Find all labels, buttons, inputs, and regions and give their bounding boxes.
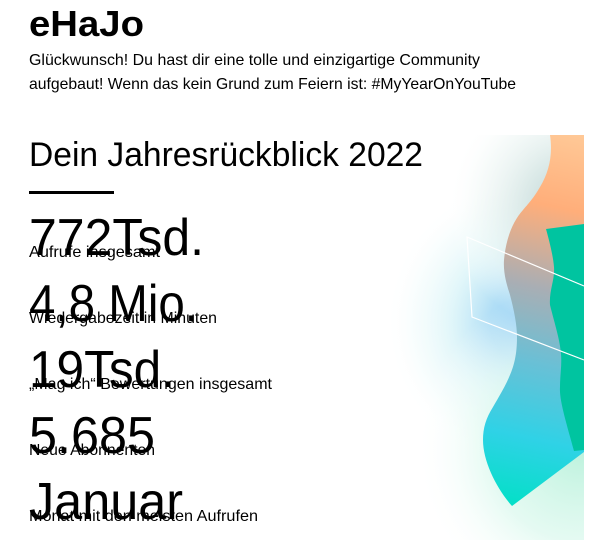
- stat: watch time: Wiedergabezeit in Minuten: [29, 310, 217, 327]
- title: eHaJo: [29, 3, 144, 44]
- heading underline: [29, 191, 114, 194]
- decorative gradient artwork: [416, 135, 584, 540]
- intro text: [29, 52, 516, 93]
- glow: top: [480, 135, 551, 308]
- wave shape: orange to turquoise: [483, 135, 584, 506]
- stat: watch time: 4,8 Mio.: [29, 275, 198, 333]
- stat: likes: „Mag ich“ Bewertungen insgesamt: [29, 376, 273, 393]
- stat: top month: Januar: [29, 473, 183, 531]
- stat: subscribers: 5.685: [29, 407, 155, 465]
- wave shape: green: [546, 224, 584, 451]
- stat: views: Aufrufe insgesamt: [29, 244, 161, 261]
- glow: green: [456, 310, 584, 540]
- stat: views: 772Tsd.: [29, 209, 204, 267]
- glow: blue: [416, 232, 517, 403]
- stat: top month: Monat mit den meisten Aufrufen: [29, 508, 258, 525]
- stat: likes: 19Tsd.: [29, 341, 175, 399]
- intro text: Glückwunsch! Du hast dir eine tolle und einzigartige Community: [29, 52, 480, 69]
- white outline shape: [467, 237, 584, 360]
- stat: likes: [29, 341, 273, 399]
- intro text: aufgebaut! Wenn das kein Grund zum Feiern ist: #MyYearOnYouTube: [29, 76, 516, 93]
- stat: subscribers: Neue Abonnenten: [29, 442, 155, 459]
- section heading: Dein Jahresrückblick 2022: [29, 136, 423, 174]
- stat: top month: [29, 473, 258, 531]
